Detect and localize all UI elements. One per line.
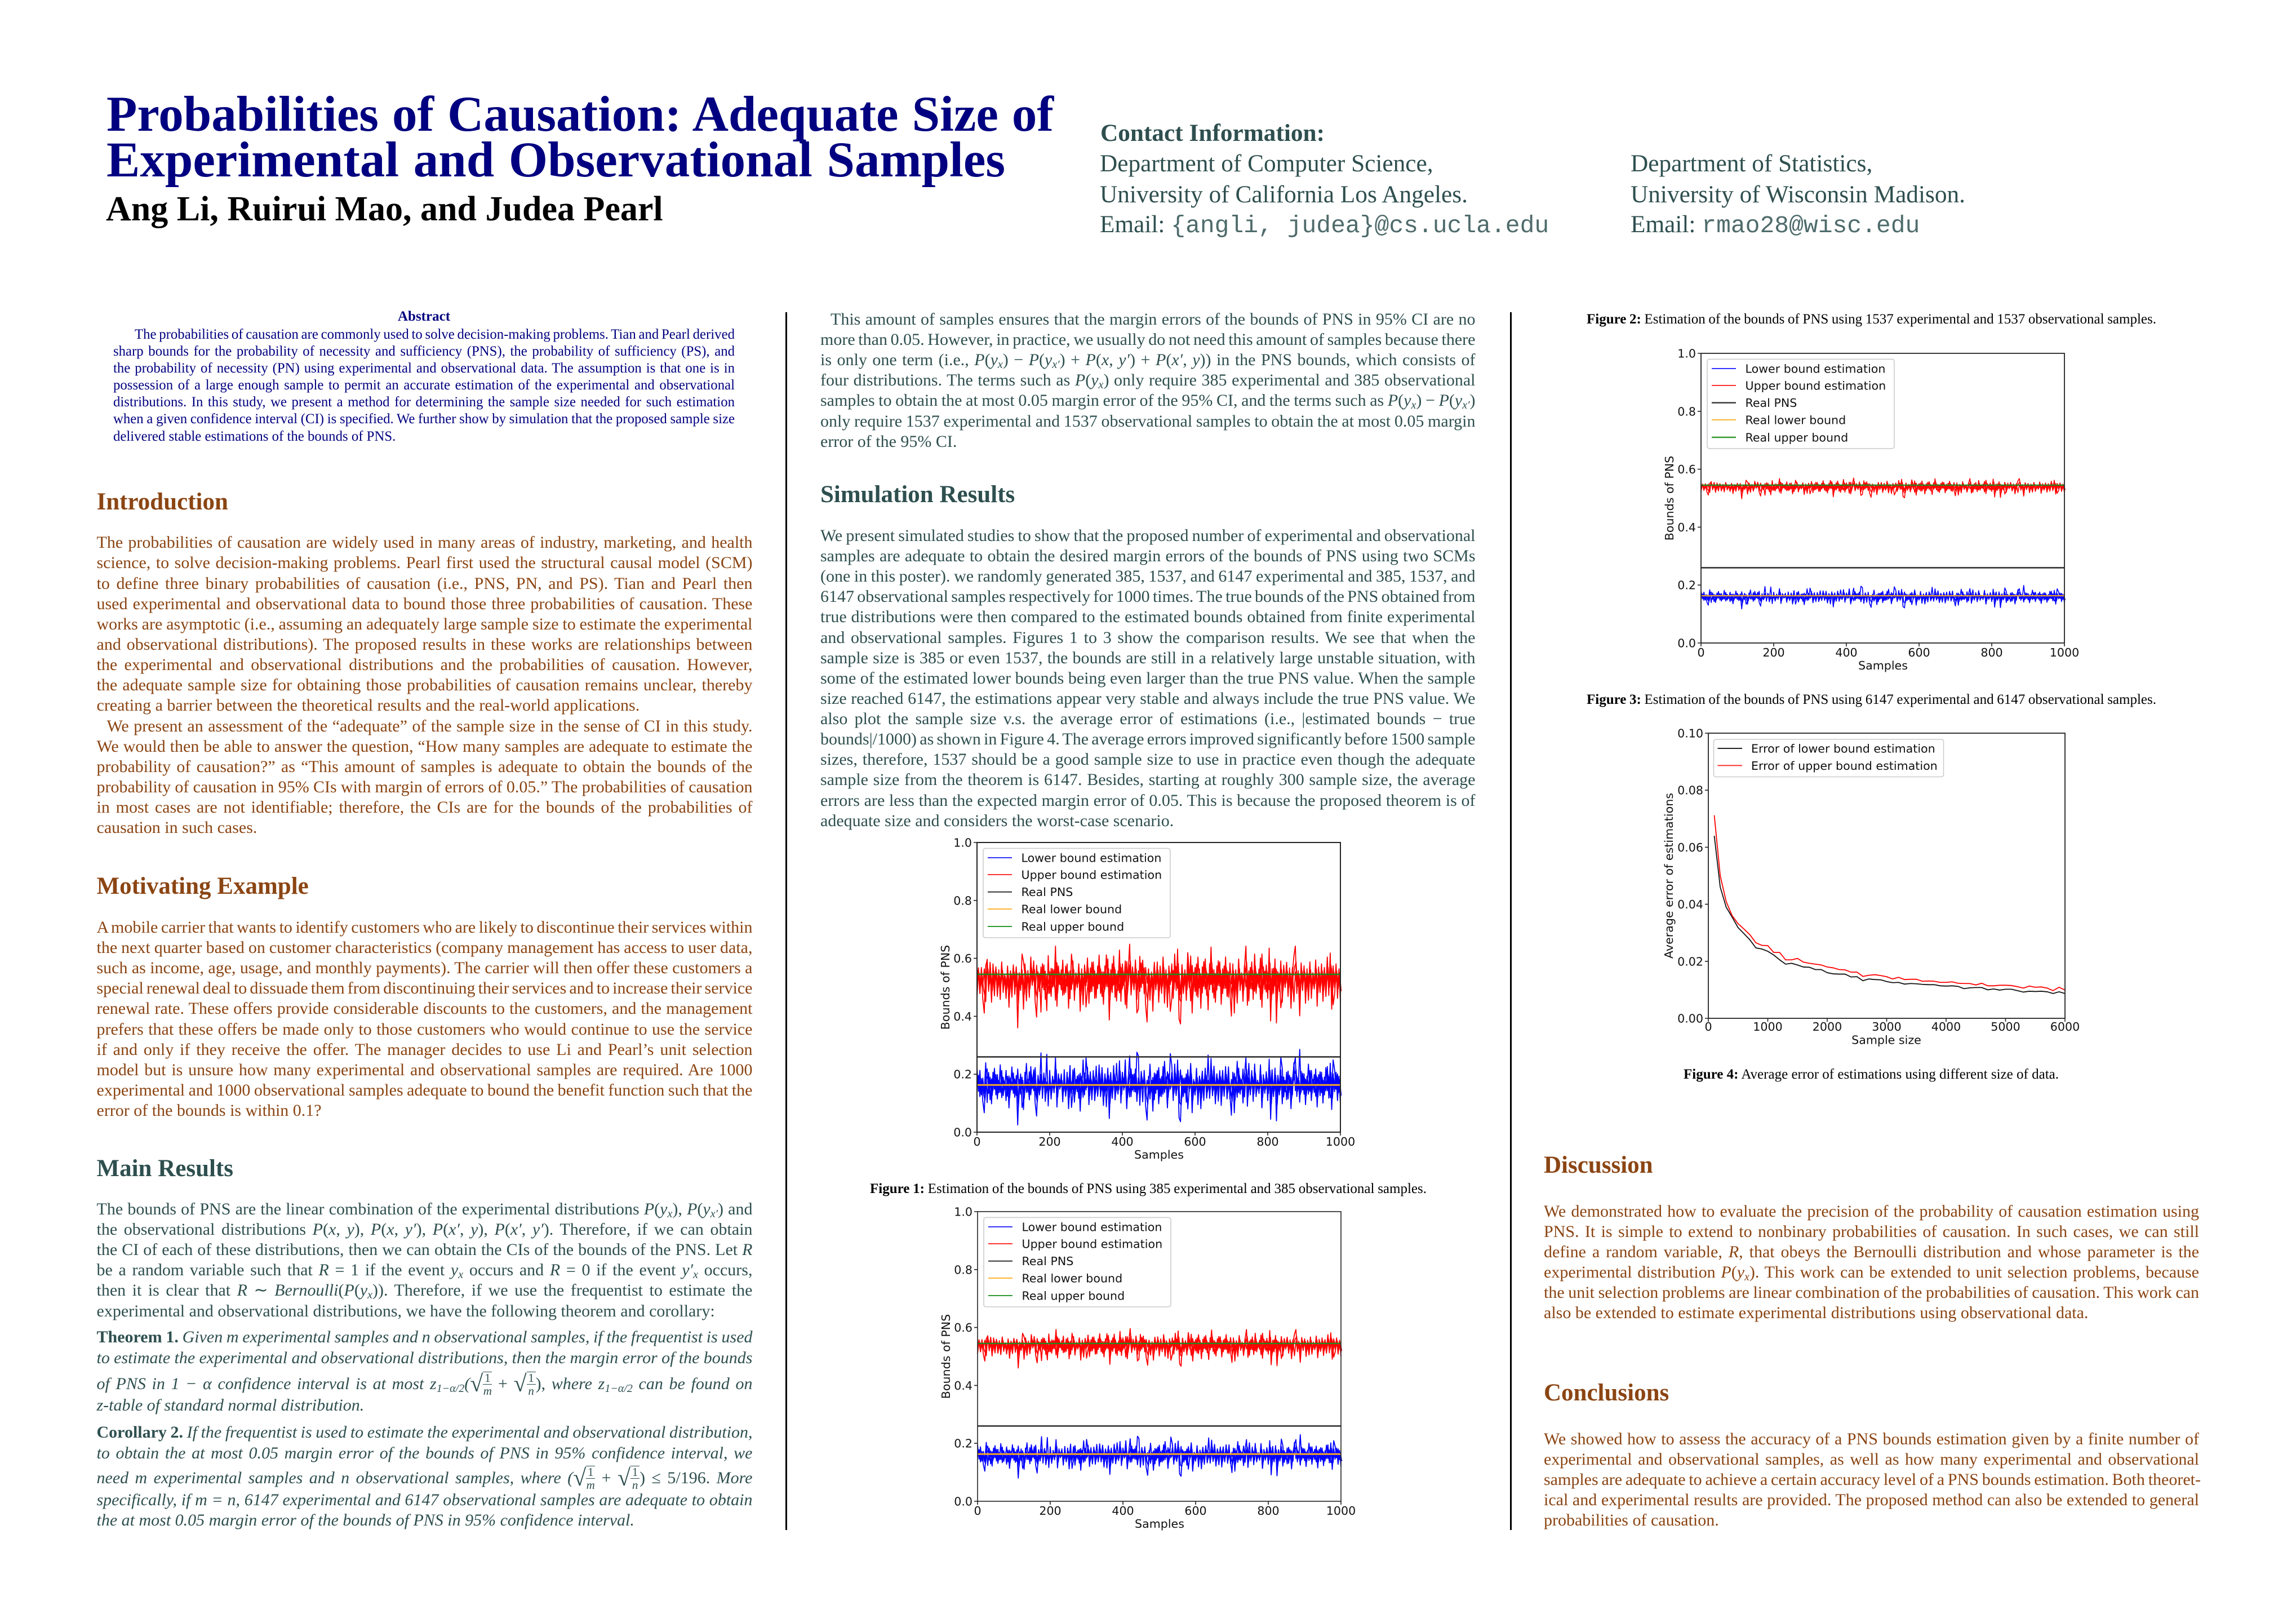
- title: Probabilities of Causation: Adequate Size of: [106, 87, 1054, 142]
- text: motivating example body: A mobile carrier that wants to identify customers who are likely to discontinue their services within: [97, 918, 753, 937]
- heading: main results: Main Results: [97, 1155, 233, 1181]
- text: conclusions body: probabilities of causation.: [1544, 1511, 1719, 1529]
- chart: third column line plot between figure 2 and figure 3 captions: 0.2: [1677, 579, 1696, 592]
- text: main results body: be a random variable such that R = 1 if the event yx occurs and R = 0 if the event y′x occurs,: [97, 1261, 752, 1281]
- text: corollary 2: to obtain the at most 0.05 margin error of the bounds of PNS in 95% confidence interval, we: [97, 1444, 753, 1462]
- chart: figure 1 line plot: 0.2: [953, 1068, 972, 1081]
- legend: second plot: [984, 1217, 1171, 1307]
- text: introduction body: the adequate sample size for obtaining those probabilities of causation remains unclear, thereby: [97, 676, 753, 694]
- text: margin errors paragraph: error of the 95% CI.: [820, 432, 957, 451]
- chart: second line plot below figure 1 caption: 0: [974, 1504, 982, 1518]
- text: corollary 2: n: [632, 1478, 638, 1492]
- text: simulation results body: sizes, therefore, 1537 should be a good sample size to use in practice even though the adequate: [820, 750, 1475, 769]
- legend: third plot: [1707, 359, 1894, 449]
- text: margin errors paragraph: samples to obtain the at most 0.05 margin error of the 95% CI, and the terms such as P(yx) − P(yx′): [820, 391, 1475, 411]
- text: simulation results body: some of the estimated lower bounds being even larger than the true PNS value. When the sample: [820, 669, 1475, 688]
- legend: figure 1: Real PNS: [1021, 885, 1073, 899]
- text: corollary 2: specifically, if m = n, 6147 experimental and 6147 observational samples are adequate to obtain: [97, 1491, 753, 1509]
- legend: second plot: Real PNS: [1022, 1254, 1073, 1268]
- chart: figure 1 line plot: 0: [973, 1135, 981, 1148]
- chart: third column line plot between figure 2 and figure 3 captions: 0.6: [1677, 463, 1696, 476]
- text: introduction body: and observational distributions). The proposed results in these works are relationships between: [97, 635, 753, 654]
- text: conclusions body: ical and experimental results are provided. The proposed method can also be extended to general: [1544, 1491, 2199, 1509]
- chart: figure 4 average error curves: 4000: [1931, 1020, 1961, 1034]
- legend: second plot: Real upper bound: [1022, 1289, 1125, 1303]
- chart: figure 1 line plot: 0.6: [953, 952, 972, 965]
- text: introduction body: We would then be able to answer the question, “How many samples are adequate to estimate the: [97, 737, 753, 756]
- chart: figure 4 average error curves: Average error of estimations: [1662, 793, 1676, 959]
- contact information: University of California Los Angeles.: [1100, 181, 1468, 208]
- legend: second plot: Lower bound estimation: [1022, 1221, 1162, 1234]
- text: theorem 1: 1: [528, 1371, 534, 1385]
- text: theorem 1: Theorem 1. Given m experimental samples and n observational samples, if the frequentist is used: [97, 1328, 753, 1346]
- text: introduction body: to define three binary probabilities of causation (i.e., PNS, PN, and PS). Tian and Pearl then: [97, 574, 753, 593]
- panel: conclusions: [1544, 1380, 2201, 1529]
- legend: figure 1: [983, 848, 1170, 938]
- text: motivating example body: if and only if they receive the offer. The manager decides to use Li and Pearl’s unit selection: [97, 1040, 753, 1059]
- caption: figure 4: Figure 4: Average error of estimations using different size of data.: [1684, 1067, 2059, 1082]
- chart: figure 4 average error curves: 0: [1704, 1020, 1712, 1034]
- text: introduction body: science, to solve decision-making problems. Pearl first used the structural causal model (SCM): [97, 553, 753, 572]
- chart: figure 1 line plot: Bounds of PNS: [939, 945, 952, 1030]
- chart: third column line plot between figure 2 and figure 3 captions: 0.0: [1677, 637, 1696, 650]
- text: theorem 1: m: [483, 1384, 492, 1398]
- text: conclusions body: samples are adequate to achieve a certain accuracy level of a PNS bounds estimation. Both theoret-: [1544, 1470, 2201, 1489]
- chart: third column line plot between figure 2 and figure 3 captions: 0.4: [1677, 521, 1696, 534]
- text: main results body: the observational distributions P(x, y), P(x, y′), P(x′, y), P(x′, y′). Therefore, if we can obtain: [97, 1220, 753, 1239]
- text: margin errors paragraph: only require 1537 experimental and 1537 observational samples to obtain the at most 0.05 margin: [820, 411, 1475, 431]
- contact information: Contact Information:: [1100, 119, 1325, 147]
- text: motivating example body: such as income, age, usage, and monthly payments). The carrier will then offer these customers a: [97, 959, 753, 977]
- chart: figure 4 average error curves: 2000: [1813, 1020, 1842, 1034]
- legend: figure 1: Upper bound estimation: [1021, 868, 1162, 881]
- chart: third column line plot between figure 2 and figure 3 captions: 200: [1762, 646, 1785, 659]
- heading: conclusions: Conclusions: [1544, 1380, 1669, 1405]
- chart: figure 1 line plot: 1000: [1326, 1135, 1355, 1148]
- chart: figure 1 line plot: 600: [1184, 1135, 1206, 1148]
- text: main results body: [97, 1200, 753, 1320]
- text: margin errors paragraph: more than 0.05. However, in practice, we usually do not need this amount of samples because there: [820, 330, 1475, 349]
- panel: abstract: delivered stable estimations of the bounds of PNS.: [113, 429, 396, 444]
- text: corollary 2: m: [587, 1478, 595, 1492]
- caption: figure 2: Figure 2: Estimation of the bounds of PNS using 1537 experimental and 1537 observational samples.: [1587, 312, 2156, 327]
- title: Experimental and Observational Samples: [106, 132, 1005, 188]
- chart: figure 4 average error curves: 0.08: [1677, 784, 1703, 797]
- text: motivating example body: renewal rate. These offers provide considerable discounts to the customers, and the management: [97, 999, 753, 1018]
- contact information: University of Wisconsin Madison.: [1631, 181, 1965, 208]
- chart: third column line plot between figure 2 and figure 3 captions: Samples: [1858, 659, 1908, 672]
- chart: figure 4 average error curves: 5000: [1991, 1020, 2020, 1034]
- text: simulation results body: (one in this poster). we randomly generated 385, 1537, and 6147 experimental and 385, 1537, and: [820, 567, 1475, 586]
- text: simulation results body: sample size from the theorem is 6147. Besides, starting at roughly 300 sample size, the average: [820, 770, 1475, 789]
- chart: figure 4 average error curves: [1662, 727, 2080, 1047]
- contact information: Email: {angli, judea}@cs.ucla.edu: [1100, 211, 1549, 240]
- chart: third column line plot between figure 2 and figure 3 captions: 0: [1697, 646, 1705, 659]
- text: introduction body: [97, 533, 753, 837]
- text: margin errors paragraph: [820, 310, 1475, 451]
- text: conclusions body: [1544, 1430, 2201, 1529]
- text: main results body: experimental and observational distributions, we have the following theorem and corollary:: [97, 1302, 715, 1320]
- chart: second line plot below figure 1 caption: 1000: [1326, 1504, 1356, 1518]
- text: conclusions body: experimental and observational samples, as well as how many experimental and observational: [1544, 1450, 2199, 1469]
- chart: second line plot below figure 1 caption: 0.4: [954, 1379, 972, 1393]
- panel: abstract: distributions. In this study, we present a method for determining the sample size needed for such estimation: [113, 394, 735, 410]
- text: introduction body: used experimental and observational data to bound those three probabilities of causation. These: [97, 595, 753, 613]
- text: introduction body: the experimental and observational distributions and the probabilities of causation. However,: [97, 655, 753, 674]
- text: simulation results body: errors are less than the expected margin error of 0.05. This is because the proposed theorem is of: [820, 791, 1475, 810]
- authors: Ang Li, Ruirui Mao, and Judea Pearl: [106, 190, 663, 228]
- text: main results body: The bounds of PNS are the linear combination of the experimental distributions P(yx), P(yx′) and: [97, 1200, 753, 1220]
- chart: third column line plot between figure 2 and figure 3 captions: Bounds of PNS: [1663, 456, 1676, 540]
- text: simulation results body: samples are adequate to obtain the desired margin errors of the bounds of PNS using two SCMs: [820, 547, 1475, 565]
- text: margin errors paragraph: four distributions. The terms such as P(yx) only require 385 experimental and 385 observational: [820, 371, 1475, 391]
- text: corollary 2: [97, 1423, 753, 1529]
- text: corollary 2: need m experimental samples and n observational samples, where (√ + √ ) ≤ 5/196. More: [97, 1465, 753, 1491]
- text: theorem 1: to estimate the experimental and observational distributions, then the margin error of the bounds: [97, 1349, 753, 1367]
- contact information: Department of Statistics,: [1631, 150, 1872, 177]
- caption: figure 1: Figure 1: Estimation of the bounds of PNS using 385 experimental and 385 observational samples.: [870, 1181, 1427, 1196]
- text: simulation results body: size reached 6147, the estimations appear very stable and always include the true PNS value. We: [820, 689, 1475, 708]
- contact information: [1100, 119, 1965, 240]
- chart: figure 4 average error curves: 0.00: [1677, 1012, 1703, 1026]
- legend: third plot: Lower bound estimation: [1746, 362, 1885, 375]
- text: introduction body: creating a barrier between the theoretical results and the real-world applications.: [97, 696, 639, 715]
- panel: abstract: Abstract: [398, 309, 450, 324]
- chart: third column line plot between figure 2 and figure 3 captions: [1663, 347, 2079, 672]
- text: conclusions body: We showed how to assess the accuracy of a PNS bounds estimation given by a finite number of: [1544, 1430, 2199, 1448]
- chart: second line plot below figure 1 caption: 0.0: [954, 1495, 972, 1508]
- text: discussion body: [1544, 1202, 2199, 1322]
- chart: figure 4 average error curves: 1000: [1753, 1020, 1783, 1034]
- text: simulation results body: adequate size and considers the worst-case scenario.: [820, 812, 1174, 830]
- chart: figure 4 average error curves: 0.04: [1677, 898, 1703, 911]
- panel: abstract: The probabilities of causation are commonly used to solve decision-making problems. Tian and Pearl derived: [135, 327, 735, 342]
- chart: second line plot below figure 1 caption: [939, 1205, 1356, 1531]
- text: introduction body: We present an assessment of the “adequate” of the sample size in the sense of CI in this study.: [107, 717, 753, 735]
- chart: second line plot below figure 1 caption: Bounds of PNS: [939, 1314, 953, 1399]
- text: motivating example body: the next quarter based on customer characteristics (company management has access to user data,: [97, 938, 753, 957]
- legend: figure 1: Real upper bound: [1021, 920, 1124, 933]
- panel: abstract: possession of a large enough sample to permit an accurate estimation of the experimental and observational: [113, 378, 735, 393]
- panel: discussion: [1544, 1152, 2199, 1322]
- text: main results body: then it is clear that R ∼ Bernoulli(P(yx)). Therefore, if we use the frequentist to estimate the: [97, 1281, 753, 1301]
- chart: figure 1 line plot: 800: [1256, 1135, 1279, 1148]
- text: margin errors paragraph: is only one term (i.e., P(yx) − P(yx′) + P(x, y′) + P(x′, y)) in the PNS bounds, which consists of: [820, 351, 1475, 371]
- text: simulation results body: also plot the sample size v.s. the average error of estimations (i.e., |estimated bounds − true: [820, 709, 1475, 728]
- legend: figure 4: Error of upper bound estimation: [1751, 759, 1938, 773]
- text: theorem 1: 1: [485, 1371, 491, 1385]
- chart: figure 1 line plot: 0.8: [953, 894, 972, 907]
- legend: third plot: Real upper bound: [1746, 431, 1848, 444]
- panel: main results: [96, 1155, 753, 1529]
- panel: introduction: [97, 489, 753, 837]
- text: introduction body: probability of causation in 95% CIs with margin of errors of 0.05.” The probabilities of causation: [97, 778, 753, 796]
- chart: second line plot below figure 1 caption: 0.8: [954, 1263, 972, 1276]
- text: theorem 1: n: [528, 1384, 534, 1398]
- panel: abstract: [113, 309, 735, 444]
- text: introduction body: causation in such cases.: [97, 818, 257, 837]
- text: corollary 2: 1: [588, 1465, 594, 1479]
- chart: third column line plot between figure 2 and figure 3 captions: 400: [1835, 646, 1858, 659]
- text: simulation results body: bounds|/1000) as shown in Figure 4. The average errors improved significantly before 1500 sample: [820, 730, 1475, 748]
- chart: second line plot below figure 1 caption: 800: [1257, 1504, 1280, 1518]
- text: corollary 2: the at most 0.05 margin error of the bounds of PNS in 95% confidence interval.: [97, 1511, 634, 1529]
- title: [106, 87, 1054, 188]
- legend: figure 4: [1714, 739, 1944, 777]
- contact information: Email: rmao28@wisc.edu: [1631, 211, 1920, 240]
- text: discussion body: We demonstrated how to evaluate the precision of the probability of causation estimation using: [1544, 1202, 2199, 1221]
- text: corollary 2: 1: [632, 1465, 638, 1479]
- chart: third column line plot between figure 2 and figure 3 captions: 1.0: [1677, 347, 1696, 361]
- text: main results body: the CI of each of these distributions, then we can obtain the CIs of the bounds of the PNS. Let R: [97, 1240, 753, 1259]
- legend: figure 1: Real lower bound: [1021, 903, 1122, 916]
- chart: figure 4 average error curves: Sample size: [1851, 1034, 1921, 1047]
- text: introduction body: works are asymptotic (i.e., assuming an adequately large sample size to estimate the experimental: [97, 615, 753, 633]
- chart: second line plot below figure 1 caption: 0.6: [954, 1321, 972, 1334]
- text: motivating example body: experimental and 1000 observational samples adequate to bound the benefit function such that the: [97, 1081, 753, 1099]
- chart: second line plot below figure 1 caption: 200: [1039, 1504, 1062, 1518]
- heading: simulation results: Simulation Results: [820, 481, 1015, 507]
- text: simulation results body: 6147 observational samples respectively for 1000 times. The true bounds of the PNS obtained from: [820, 587, 1475, 606]
- contact information: Department of Computer Science,: [1100, 150, 1433, 177]
- text: motivating example body: [97, 918, 753, 1120]
- panel: motivating example: [97, 873, 753, 1120]
- text: simulation results body: [820, 526, 1475, 830]
- legend: third plot: Real PNS: [1746, 396, 1797, 410]
- text: discussion body: also be extended to estimate experimental distributions using observational data.: [1544, 1303, 2088, 1322]
- chart: figure 4 average error curves: 3000: [1872, 1020, 1902, 1034]
- legend: figure 1: Lower bound estimation: [1021, 851, 1161, 864]
- chart: third column line plot between figure 2 and figure 3 captions: 600: [1908, 646, 1930, 659]
- heading: motivating example: Motivating Example: [97, 873, 309, 899]
- text: theorem 1: of PNS in 1 − α confidence interval is at most z1−α/2(√ + √ ), where z1−α/2 can be found on: [97, 1371, 753, 1397]
- panel: abstract: when a given confidence interval (CI) is specified. We further show by simulation that the proposed sample size: [113, 411, 735, 427]
- text: margin errors paragraph: This amount of samples ensures that the margin errors of the bounds of PNS in 95% CI are no: [831, 310, 1475, 329]
- chart: figure 4 average error curves: 0.06: [1677, 841, 1703, 854]
- legend: third plot: Real lower bound: [1746, 414, 1846, 427]
- text: simulation results body: and observational samples. Figures 1 to 3 show the comparison results. We see that when the: [820, 628, 1475, 647]
- text: discussion body: experimental distribution P(yx). This work can be extended to unit selection problems, because: [1544, 1263, 2199, 1283]
- chart: figure 1 line plot: 1.0: [953, 836, 972, 850]
- text: theorem 1: [96, 1328, 753, 1414]
- chart: second line plot below figure 1 caption: 600: [1184, 1504, 1207, 1518]
- text: introduction body: in most cases are not identifiable; therefore, the CIs are for the bounds of the probabilities of: [97, 798, 753, 817]
- legend: second plot: Upper bound estimation: [1022, 1238, 1162, 1251]
- legend: second plot: Real lower bound: [1022, 1271, 1122, 1285]
- chart: second line plot below figure 1 caption: 0.2: [954, 1437, 972, 1451]
- chart: figure 1 line plot: [939, 836, 1355, 1161]
- chart: second line plot below figure 1 caption: Samples: [1135, 1517, 1184, 1531]
- text: simulation results body: sample size is 385 or even 1537, the bounds are still in a relatively large unstable situation, with: [820, 649, 1475, 667]
- text: discussion body: the unit selection problems are linear combination of the probabilities of causation. This work can: [1544, 1283, 2199, 1302]
- divider: column 1 and 2: [785, 312, 787, 1530]
- chart: third column line plot between figure 2 and figure 3 captions: 800: [1980, 646, 2003, 659]
- chart: figure 1 line plot: Samples: [1134, 1148, 1184, 1161]
- text: simulation results body: true distributions were then compared to the estimated bounds obtained from finite experimental: [820, 607, 1475, 626]
- chart: second line plot below figure 1 caption: 1.0: [954, 1205, 972, 1218]
- chart: second line plot below figure 1 caption: 400: [1112, 1504, 1134, 1518]
- chart: third column line plot between figure 2 and figure 3 captions: 1000: [2050, 646, 2079, 659]
- panel: simulation results: [820, 481, 1475, 830]
- text: motivating example body: error of the bounds is within 0.1?: [97, 1101, 322, 1120]
- text: simulation results body: We present simulated studies to show that the proposed number of experimental and observational: [820, 526, 1475, 545]
- text: discussion body: define a random variable, R, that obeys the Bernoulli distribution and whose parameter is the: [1544, 1243, 2199, 1261]
- chart: figure 4 average error curves: 0.10: [1677, 727, 1703, 740]
- caption: figure 3: Figure 3: Estimation of the bounds of PNS using 6147 experimental and 6147 observational samples.: [1587, 692, 2156, 707]
- heading: discussion: Discussion: [1544, 1152, 1653, 1178]
- divider: column 2 and 3: [1510, 312, 1512, 1530]
- chart: third column line plot between figure 2 and figure 3 captions: 0.8: [1677, 405, 1696, 418]
- text: theorem 1: z-table of standard normal distribution.: [97, 1396, 364, 1414]
- text: introduction body: probability of causation?” as “This amount of samples is adequate to obtain the bounds of the: [97, 757, 753, 776]
- text: motivating example body: prefers that these offers be made only to those customers who would continue to use the service: [97, 1020, 753, 1038]
- heading: introduction: Introduction: [97, 489, 228, 515]
- chart: figure 1 line plot: 200: [1038, 1135, 1061, 1148]
- chart: figure 1 line plot: 0.0: [953, 1126, 972, 1139]
- text: discussion body: PNS. It is simple to extend to nonbinary probabilities of causation. In such cases, we can still: [1544, 1222, 2199, 1241]
- chart: figure 4 average error curves: 0.02: [1677, 955, 1703, 968]
- text: introduction body: The probabilities of causation are widely used in many areas of industry, marketing, and health: [97, 533, 753, 552]
- chart: figure 4 average error curves: 6000: [2050, 1020, 2080, 1034]
- legend: figure 4: Error of lower bound estimation: [1751, 742, 1935, 755]
- text: motivating example body: model but is unsure how many experimental and observational samples are required. Are 1000: [97, 1061, 753, 1079]
- legend: third plot: Upper bound estimation: [1746, 379, 1886, 392]
- text: corollary 2: Corollary 2. If the frequentist is used to estimate the experimental and observational distribution,: [97, 1423, 753, 1442]
- text: motivating example body: special renewal deal to dissuade them from discontinuing their services and to increase their service: [97, 979, 753, 997]
- chart: figure 1 line plot: 0.4: [953, 1010, 972, 1023]
- panel: abstract: sharp bounds for the probability of necessity and sufficiency (PNS), the probability of sufficiency (PS), and: [113, 344, 735, 359]
- panel: abstract: the probability of necessity (PN) using experimental and observational data. The assumption is that one is in: [113, 361, 735, 376]
- chart: figure 1 line plot: 400: [1111, 1135, 1134, 1148]
